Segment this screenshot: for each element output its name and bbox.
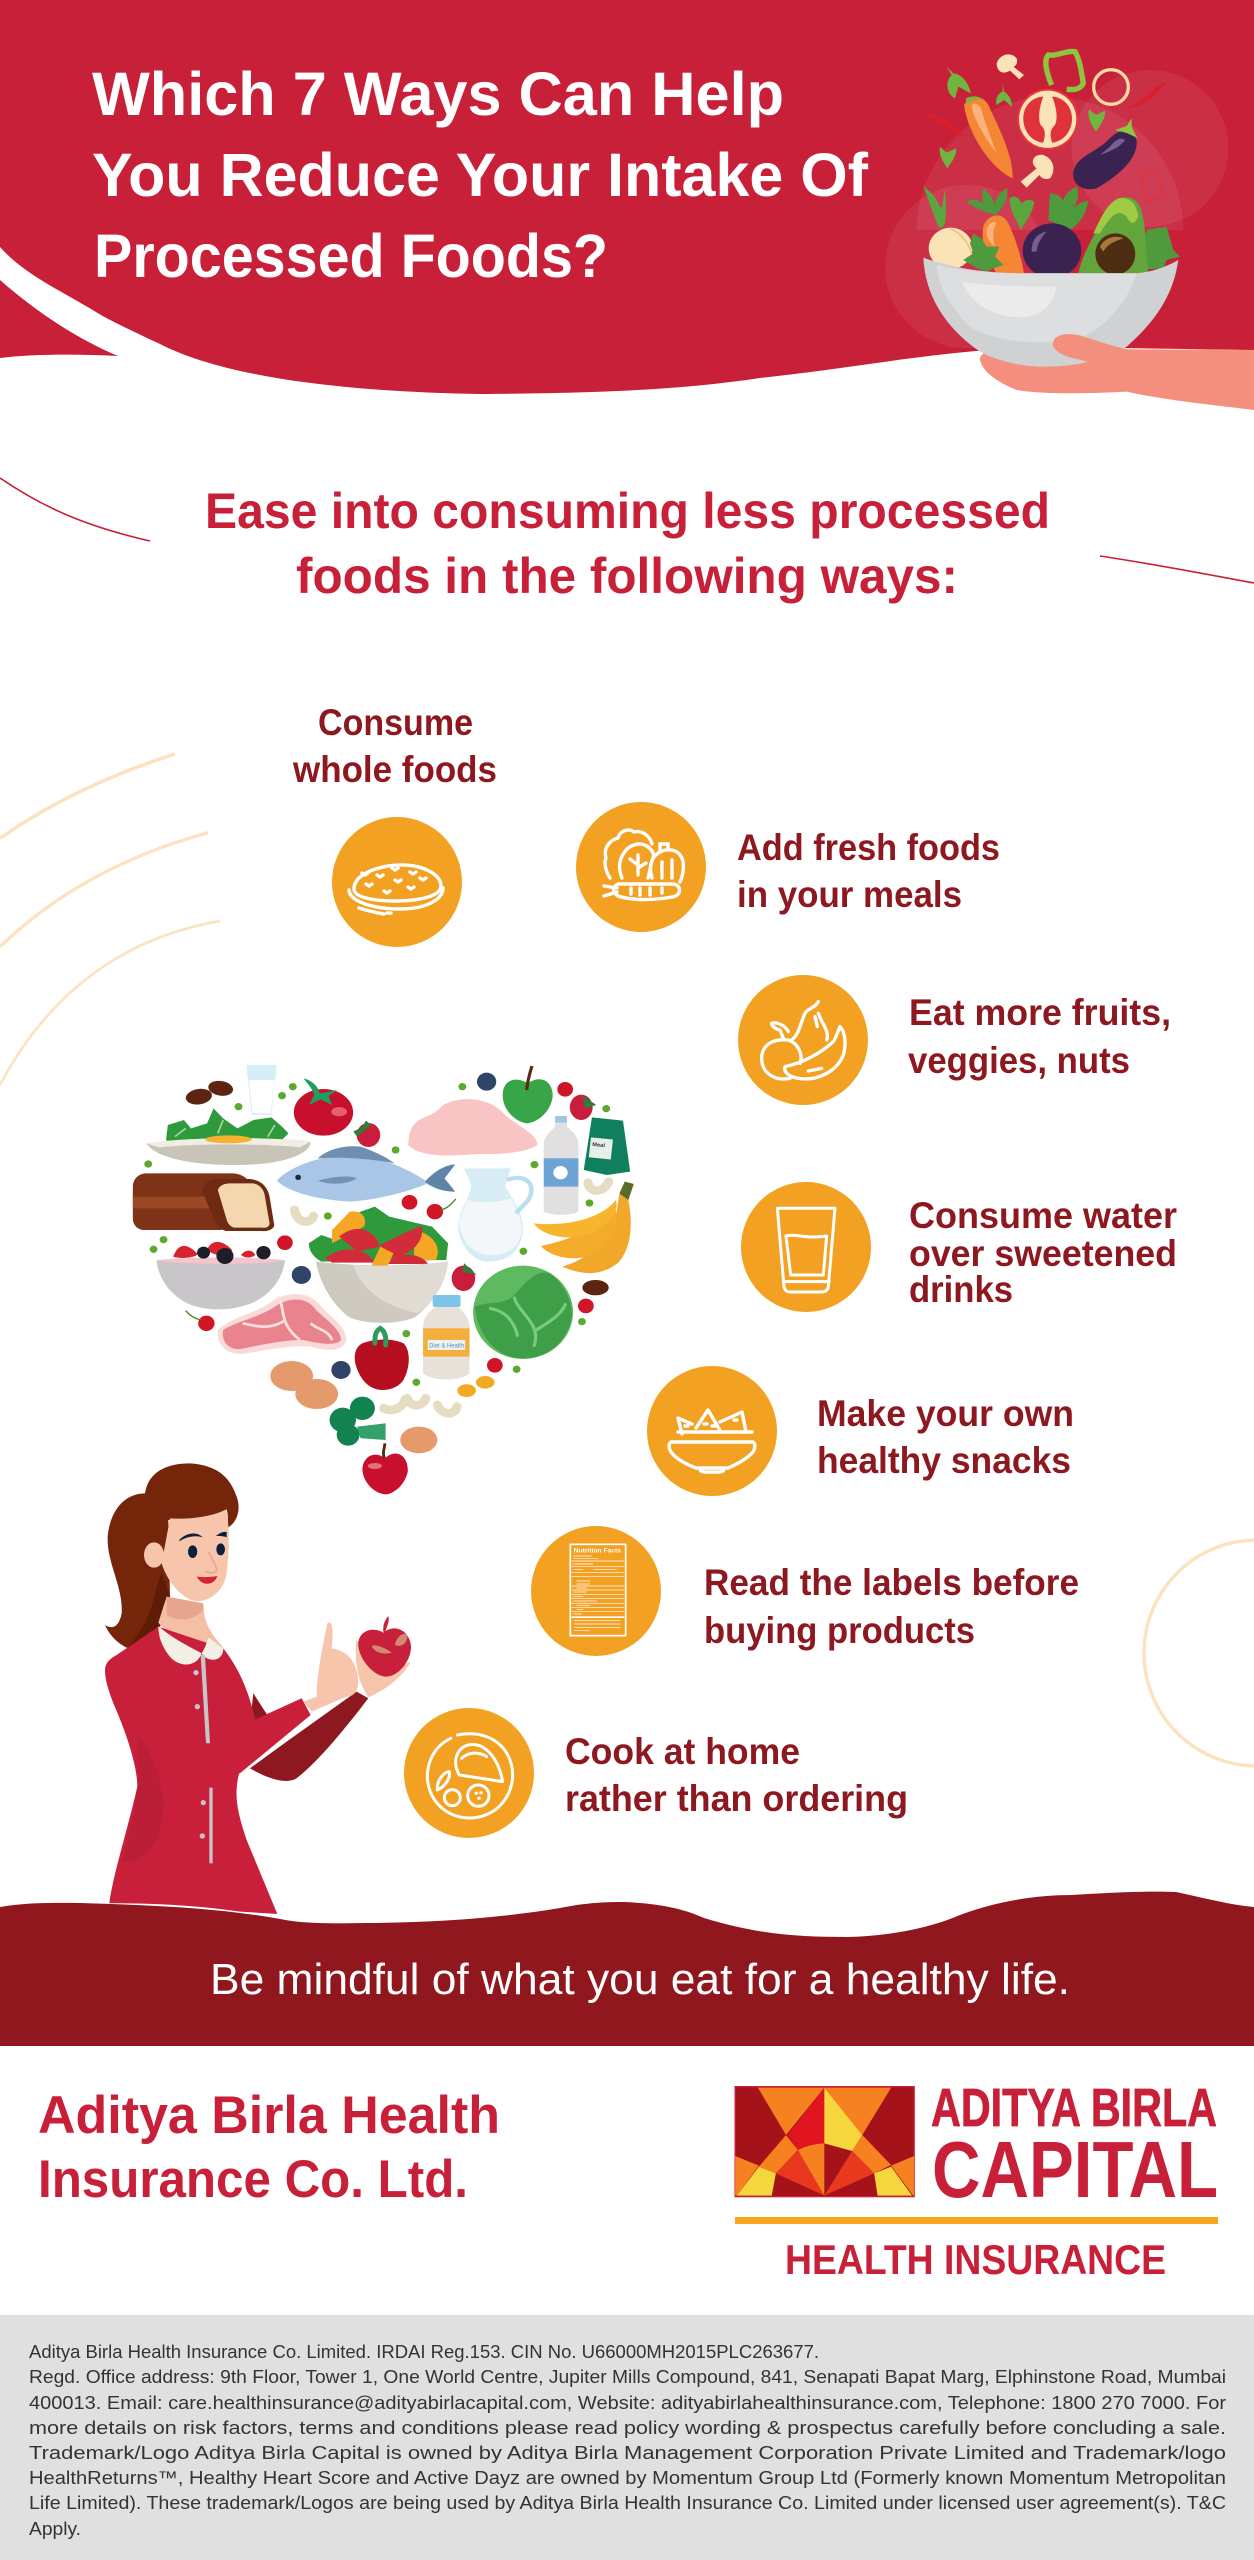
vitamin jar xyxy=(423,1295,469,1380)
logo rule xyxy=(735,2217,1218,2224)
illustration: woman holding an apple xyxy=(105,1463,411,1914)
nuts xyxy=(184,1079,609,1295)
header panel: red wave background xyxy=(0,0,1254,394)
falling vegetables xyxy=(920,51,1168,202)
near arm xyxy=(193,1698,311,1790)
company name xyxy=(38,2086,500,2209)
dress xyxy=(105,1627,277,1914)
disclaimer text: Life Limited). These trademark/Logos are being used by Aditya Birla Health Insurance Co. Limited under licensed user agreement(s). T&C xyxy=(29,2492,1226,2513)
icon: fresh vegetables xyxy=(576,802,706,932)
icon: nutrition label xyxy=(531,1526,661,1656)
logo: Aditya Birla Capital xyxy=(735,2078,1218,2283)
disclaimer text: Aditya Birla Health Insurance Co. Limited. IRDAI Reg.153. CIN No. U66000MH2015PLC263677. xyxy=(29,2341,819,2362)
bread xyxy=(133,1173,274,1231)
label: buying products xyxy=(704,1610,975,1651)
red pepper xyxy=(355,1328,409,1390)
icon: nutrition label: Nutrition Facts xyxy=(574,1548,621,1555)
label xyxy=(737,827,1000,915)
salad bowl xyxy=(309,1207,448,1323)
apple xyxy=(358,1616,411,1677)
milk glass xyxy=(246,1065,277,1115)
berries xyxy=(198,1082,594,1373)
item 4: water over sweetened drinks xyxy=(741,1182,1177,1312)
decorative curve lines xyxy=(0,478,1254,583)
thumb xyxy=(1053,334,1133,370)
green food packet: Meal xyxy=(592,1142,606,1149)
hand pointing xyxy=(303,1623,358,1712)
sub-heading: foods in the following ways: xyxy=(296,548,958,604)
hand palm xyxy=(980,349,1254,410)
collar xyxy=(158,1626,223,1665)
label: Add fresh foods xyxy=(737,827,1000,868)
cashews xyxy=(295,1182,609,1413)
item 5: healthy snacks xyxy=(647,1366,1074,1496)
disclaimer text: 400013. Email: care.healthinsurance@adityabirlacapital.com, Website: adityabirlahealthinsurance.com, Telephone: 1800 270 7000. For xyxy=(29,2392,1226,2413)
company name: Insurance Co. Ltd. xyxy=(38,2150,468,2209)
cabbage xyxy=(473,1266,573,1359)
sub-heading xyxy=(205,483,1050,604)
green food packet xyxy=(584,1117,630,1175)
title: Processed Foods? xyxy=(94,222,608,290)
label: Consume water xyxy=(909,1195,1177,1236)
disclaimer text: HealthReturns™, Healthy Heart Score and Active Dayz are owned by Momentum Group Ltd (Formerly known Momentum Metropolitan xyxy=(29,2467,1226,2488)
milk jug xyxy=(458,1168,531,1262)
label xyxy=(704,1562,1079,1651)
far arm xyxy=(250,1692,368,1781)
broccoli xyxy=(330,1397,386,1446)
disclaimer text: more details on risk factors, terms and conditions please read policy wording & prospectus carefully before concluding a sale. xyxy=(29,2417,1226,2438)
disclaimer text: Regd. Office address: 9th Floor, Tower 1, One World Centre, Jupiter Mills Compound, 841, Senapati Bapat Marg, Elphinstone Road, Mumbai xyxy=(29,2366,1226,2387)
label: rather than ordering xyxy=(565,1778,908,1819)
item 2: add fresh foods xyxy=(576,802,1000,932)
icon: plate of food xyxy=(404,1708,534,1838)
logo wordmark xyxy=(931,2078,1218,2214)
blueberries xyxy=(292,1073,496,1379)
illustration: hand holding bowl of vegetables xyxy=(885,51,1254,410)
placket and buttons xyxy=(193,1655,213,1863)
item 1: consume whole foods xyxy=(292,702,497,947)
disclaimer text xyxy=(29,2341,1226,2539)
icon: snack bowl xyxy=(647,1366,777,1496)
label xyxy=(292,702,497,790)
decorative cream arcs xyxy=(0,754,220,1085)
disclaimer text: Apply. xyxy=(29,2518,81,2539)
item 6: read the labels xyxy=(531,1526,1079,1656)
water bottle xyxy=(544,1116,578,1215)
disclaimer panel xyxy=(0,2315,1254,2560)
label xyxy=(909,1195,1177,1310)
label: healthy snacks xyxy=(817,1440,1071,1481)
red apple xyxy=(362,1443,408,1494)
logo mark xyxy=(735,2087,914,2197)
hair xyxy=(105,1463,239,1648)
berry bowl xyxy=(156,1242,285,1309)
company name: Aditya Birla Health xyxy=(38,2086,500,2145)
label: veggies, nuts xyxy=(908,1040,1130,1081)
green apple xyxy=(503,1066,553,1123)
label: drinks xyxy=(909,1269,1013,1310)
vitamin jar: Diet & Health xyxy=(429,1342,465,1349)
tomato xyxy=(294,1078,353,1136)
steak xyxy=(218,1294,346,1354)
item 7: cook at home xyxy=(404,1708,908,1838)
label: Cook at home xyxy=(565,1731,800,1772)
icon: flatbread xyxy=(332,817,462,947)
label: over sweetened xyxy=(909,1233,1177,1274)
title: Which 7 Ways Can Help xyxy=(92,60,784,128)
sub-heading: Ease into consuming less processed xyxy=(205,483,1050,539)
fish xyxy=(277,1146,455,1202)
footer band with wave xyxy=(0,1892,1254,2046)
disclaimer text: Trademark/Logo Aditya Birla Capital is owned by Aditya Birla Management Corporation Private Limited and Trademark/logo xyxy=(29,2442,1226,2463)
band message: Be mindful of what you eat for a healthy life. xyxy=(210,1955,1070,2004)
icon: fruits xyxy=(738,975,868,1105)
label xyxy=(908,992,1171,1081)
logo tagline: HEALTH INSURANCE xyxy=(785,2236,1166,2283)
icon: glass xyxy=(741,1182,871,1312)
label: whole foods xyxy=(292,749,497,790)
vegetables in bowl xyxy=(923,185,1180,278)
title: You Reduce Your Intake Of xyxy=(92,141,869,209)
chicken xyxy=(408,1099,537,1156)
plate with egg and greens xyxy=(146,1108,311,1165)
label: Consume xyxy=(318,702,473,743)
illustration: heart of healthy foods xyxy=(133,1065,634,1494)
title xyxy=(92,60,869,290)
label: Read the labels before xyxy=(704,1562,1079,1603)
label: in your meals xyxy=(737,874,962,915)
item 3: fruits, veggies, nuts xyxy=(738,975,1171,1105)
eggs xyxy=(270,1361,437,1453)
hand holding apple xyxy=(356,1640,411,1697)
peas xyxy=(144,1083,610,1386)
label xyxy=(817,1393,1074,1481)
face xyxy=(162,1509,229,1601)
yellow dots xyxy=(457,1376,494,1397)
label xyxy=(565,1731,908,1819)
bananas xyxy=(534,1182,634,1273)
neck xyxy=(158,1597,223,1654)
label: Eat more fruits, xyxy=(909,992,1171,1033)
label: Make your own xyxy=(817,1393,1074,1434)
bowl xyxy=(923,258,1178,367)
